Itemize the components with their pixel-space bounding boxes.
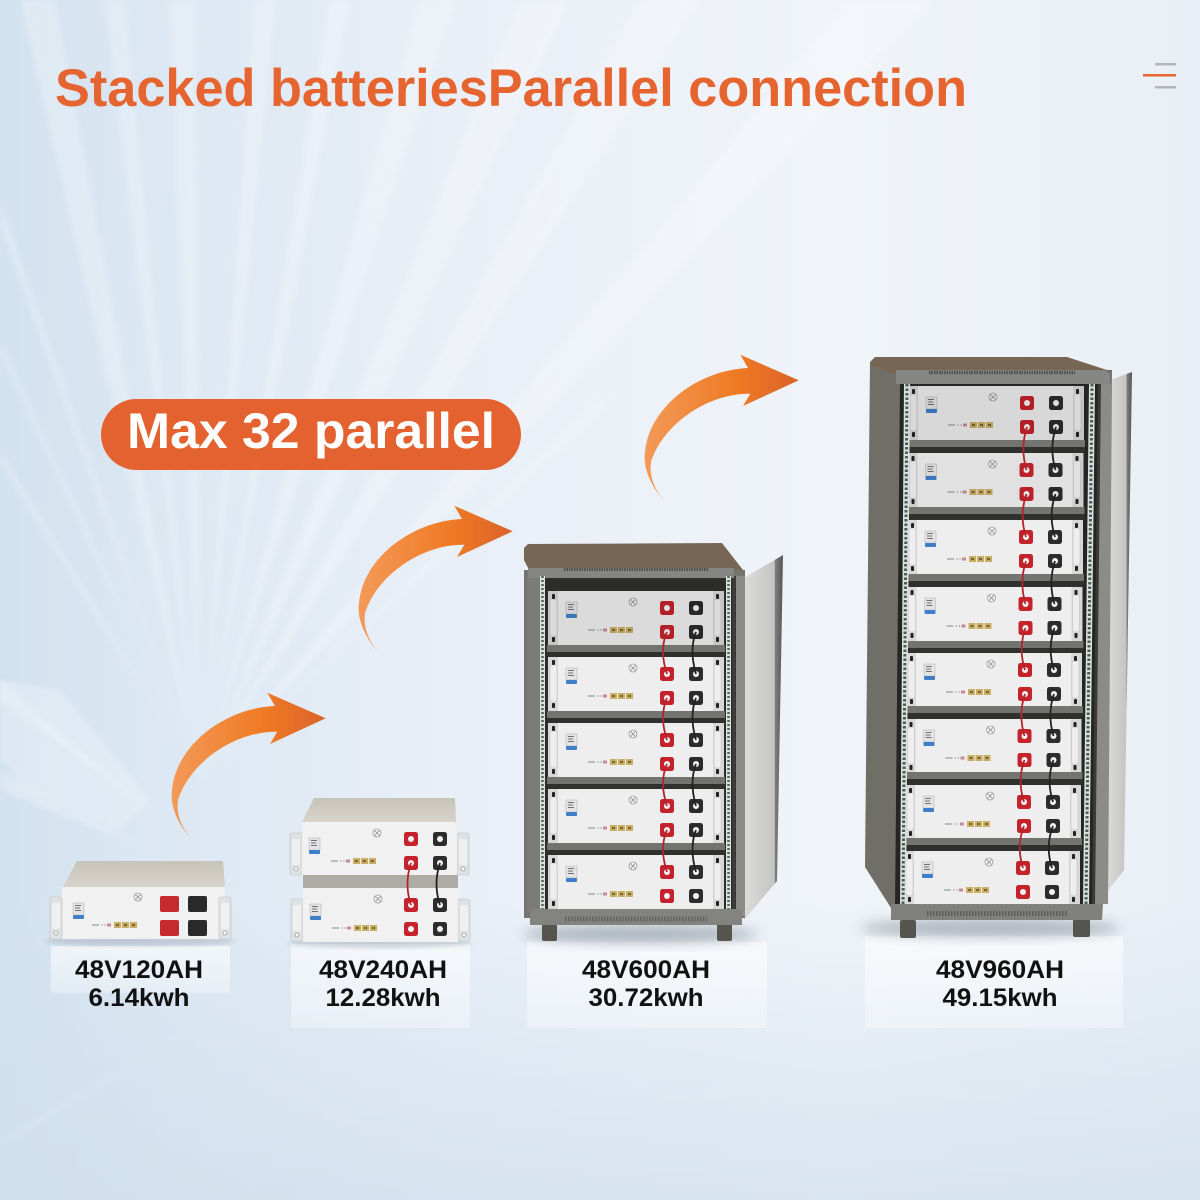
cabinet door <box>1106 372 1132 893</box>
cabinet feet <box>542 922 732 941</box>
cabinet base <box>891 904 1103 920</box>
label: 48V600AH <box>582 956 710 1012</box>
battery modules <box>547 591 725 909</box>
icon: menu <box>1143 63 1176 88</box>
label: 48V960AH <box>936 956 1064 1012</box>
cabinet body <box>524 560 745 918</box>
reflection panels <box>51 936 1123 1028</box>
black connectors <box>188 896 207 936</box>
label: 48V240AH <box>319 956 447 1012</box>
arrow 1 <box>172 693 326 840</box>
label: 48V120AH: 48V120AH <box>75 956 203 984</box>
cabinet feet <box>900 919 1090 938</box>
cabinet door <box>744 555 783 920</box>
label: 48V240AH: 12.28kwh <box>326 984 440 1012</box>
cabinet top <box>870 357 1110 374</box>
label: 48V960AH: 48V960AH <box>936 956 1064 984</box>
callout: max 32 parallel: Max 32 parallel <box>127 403 495 459</box>
arrow 2 <box>359 506 513 653</box>
battery modules <box>904 386 1085 905</box>
label: 48V600AH: 30.72kwh <box>588 984 704 1012</box>
label: 48V120AH <box>75 956 203 1012</box>
battery unit 48V120AH <box>45 861 235 946</box>
cables <box>1020 427 1056 868</box>
battery stack 48V240AH <box>288 798 472 948</box>
rack posts <box>900 384 1095 906</box>
cables <box>663 632 696 872</box>
cabinet base <box>530 909 742 925</box>
arrow 3 <box>645 355 799 502</box>
title: Stacked batteriesParallel connection <box>55 59 967 118</box>
label: 48V960AH: 49.15kwh <box>942 984 1058 1012</box>
cabinet body <box>865 362 1112 918</box>
label: 48V120AH: 6.14kwh <box>88 984 190 1012</box>
label: 48V240AH: 48V240AH <box>319 956 447 984</box>
label: 48V600AH: 48V600AH <box>582 956 710 984</box>
cabinet top <box>524 543 743 572</box>
cables <box>408 863 440 905</box>
rack posts <box>540 576 731 912</box>
red connectors <box>160 896 179 936</box>
callout: max 32 parallel <box>101 399 521 470</box>
cabinet 48V600AH <box>522 543 783 943</box>
cabinet 48V960AH <box>860 357 1132 938</box>
